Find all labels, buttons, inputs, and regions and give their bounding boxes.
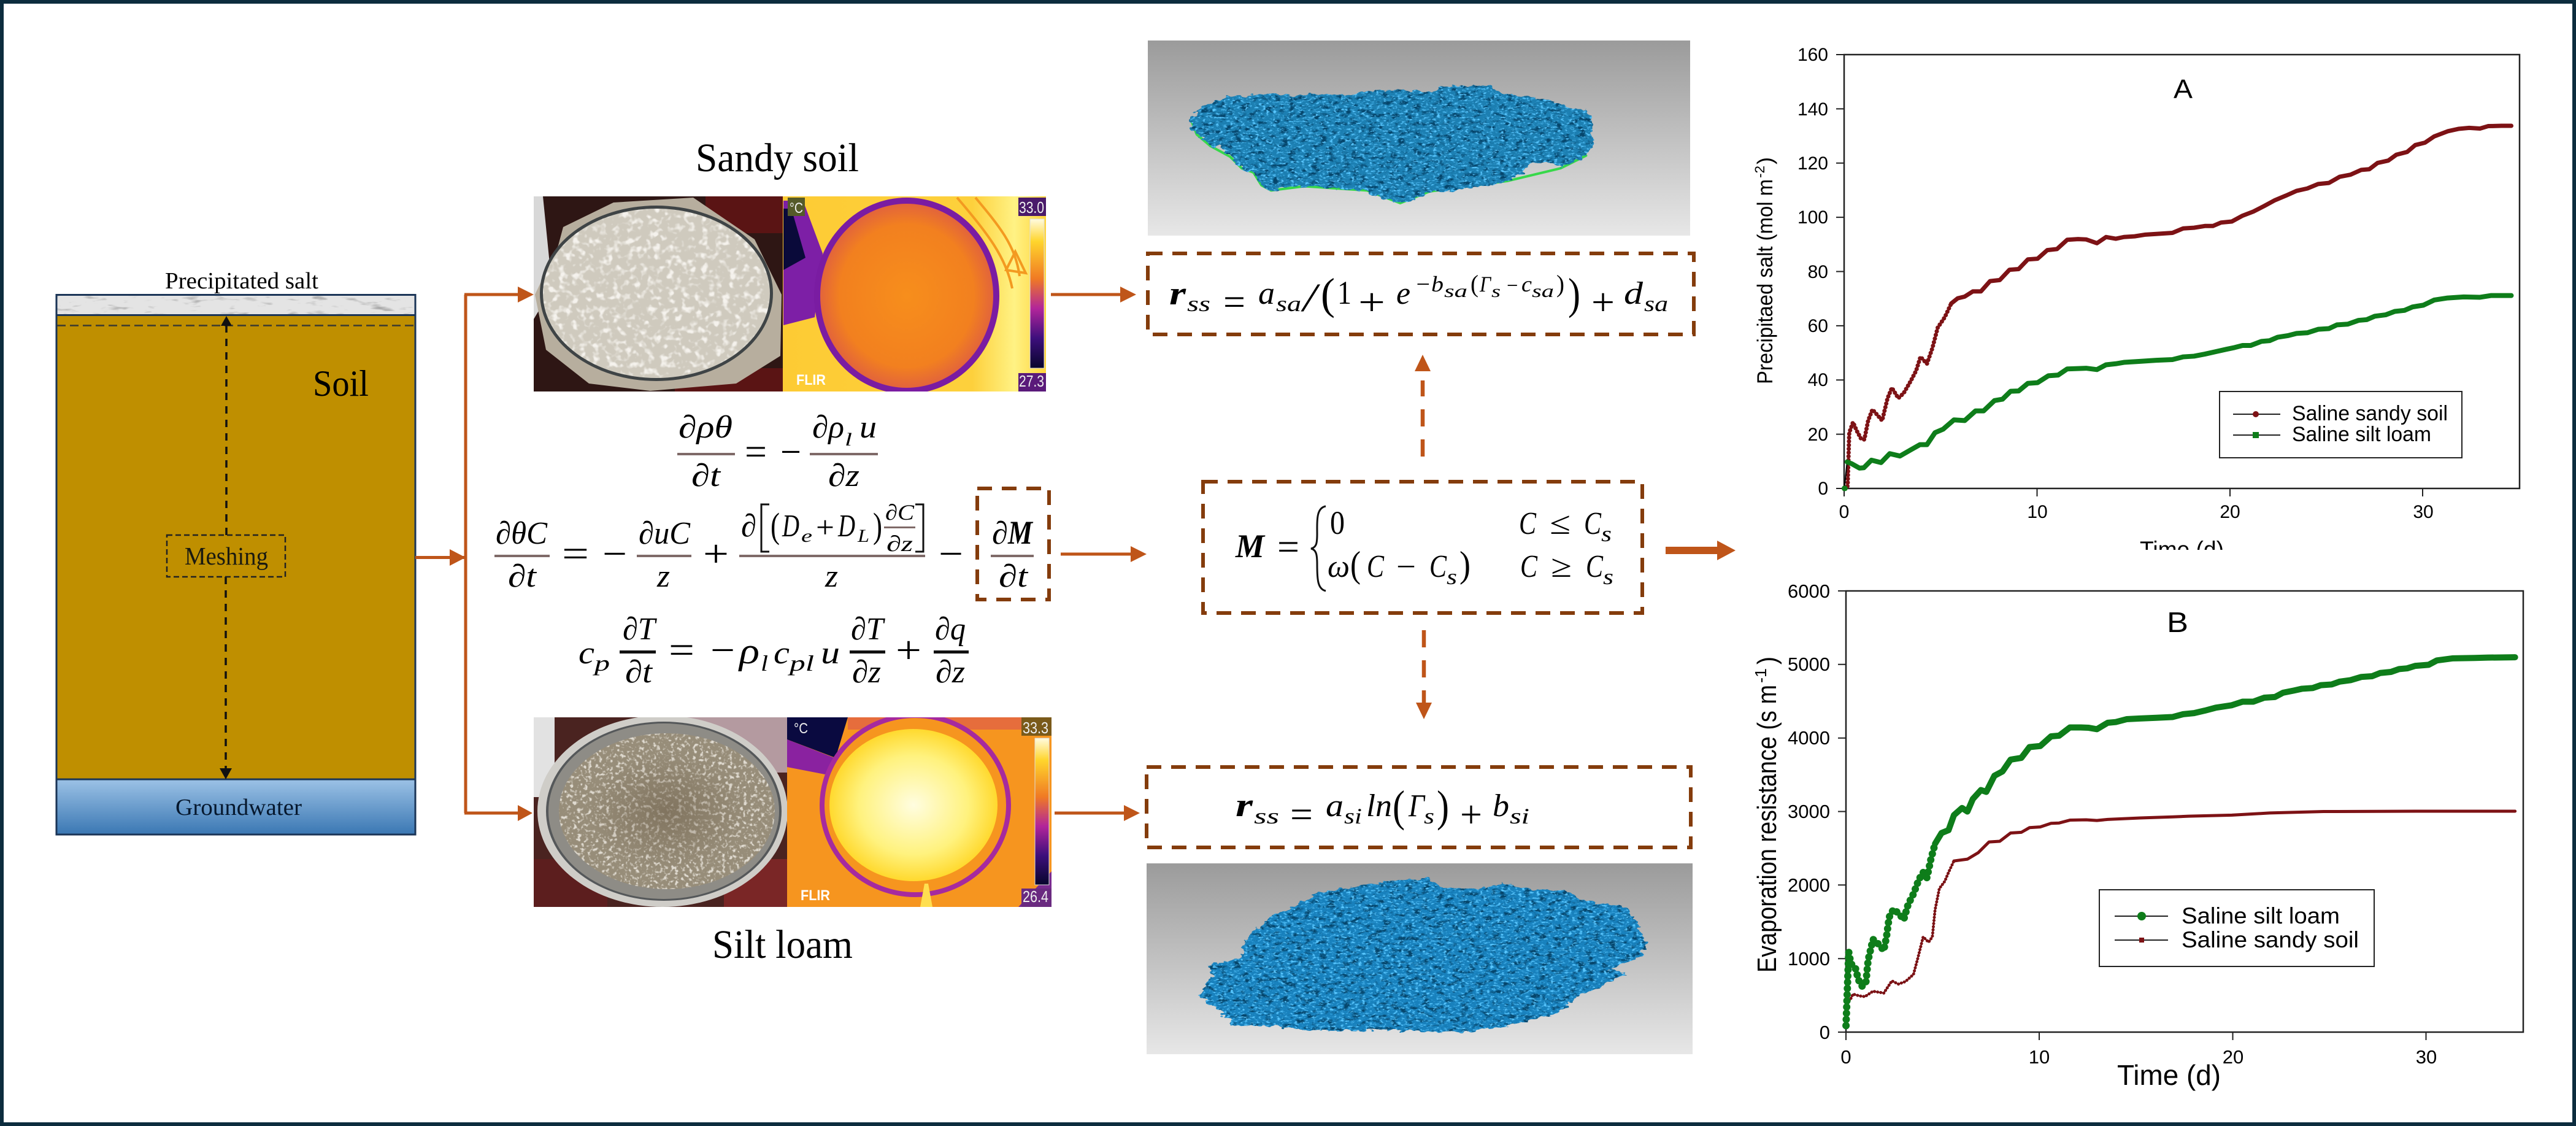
- chart A legend: [2220, 391, 2462, 458]
- chart B x axis title: Time (d): [2117, 1059, 2221, 1091]
- chart B y tick labels: [1788, 580, 1830, 1043]
- chart B x tick labels: [1840, 1046, 2437, 1068]
- label: groundwater: Groundwater: [175, 795, 302, 820]
- equation box: salt precipitation model: s: [1447, 565, 1457, 589]
- thermal image: silt loam: 33.3: [1023, 719, 1048, 737]
- chart B y axis title: -1: [1751, 668, 1770, 683]
- equation box: silt loam surface resistance: s: [1424, 804, 1434, 828]
- equation box: salt precipitation model: C: [1584, 506, 1602, 541]
- chart B legend: [2099, 890, 2374, 966]
- column outline: [56, 295, 415, 835]
- equation box: salt precipitation model: ≥: [1551, 549, 1572, 584]
- chart A axis ticks: [1836, 55, 2423, 496]
- equation box: salt precipitation model: M: [1235, 528, 1266, 565]
- equation box: salt precipitation model: C: [1367, 549, 1385, 584]
- thermal image: sandy soil: 33.0: [1019, 198, 1044, 217]
- equation box: salt precipitation model: −: [1396, 549, 1416, 584]
- equation: solute transport: ): [873, 506, 882, 546]
- equation box: sandy soil surface resistance: a: [1258, 276, 1275, 311]
- equation: water mass balance: ∂z: [828, 458, 859, 493]
- equation box: salt precipitation model: s: [1603, 565, 1613, 589]
- equation: heat transport: pl: [787, 651, 814, 676]
- series: saline silt loam: [1844, 296, 2512, 488]
- equation: solute transport: ∂uC: [639, 516, 691, 551]
- equation box: silt loam surface resistance: r: [1236, 787, 1253, 823]
- chart B x tick labels: 20: [2223, 1046, 2243, 1068]
- thermal image: silt loam: FLIR: [801, 887, 830, 904]
- equation box: sandy soil surface resistance: s: [1491, 282, 1501, 301]
- equation box: salt precipitation model: C: [1519, 506, 1537, 541]
- series: saline silt loam: [1846, 657, 2515, 1025]
- chart B y tick labels: 5000: [1788, 654, 1830, 675]
- equation box: sandy soil surface resistance: sa: [1444, 281, 1467, 301]
- equation: water mass balance: l: [845, 430, 852, 450]
- equation: solute transport: −: [602, 533, 627, 575]
- equation box: sandy soil surface resistance: 1: [1337, 274, 1351, 311]
- equation: heat transport: u: [821, 636, 840, 671]
- chart A y tick labels: 60: [1808, 316, 1828, 336]
- arrow: soil column to branches: [415, 295, 466, 813]
- equation: heat transport: ρ: [738, 631, 759, 671]
- equation box: silt loam surface resistance: si: [1344, 804, 1362, 828]
- chart A plot frame: [1844, 55, 2520, 488]
- chart A x tick labels: 20: [2220, 502, 2240, 522]
- equation box: salt precipitation model: ≤: [1550, 506, 1571, 541]
- equation: solute transport: ∂: [992, 516, 1008, 551]
- equation box: salt precipitation model: C: [1520, 549, 1538, 584]
- arrow: mesh downward: [220, 577, 232, 779]
- equation box: sandy soil surface resistance: [1148, 253, 1694, 334]
- photo: silt loam surface: [534, 715, 788, 907]
- chart A x axis title, clipped: Time (d): [2140, 537, 2224, 562]
- equation: solute transport: +: [816, 510, 834, 544]
- equation box: silt loam surface resistance: si: [1510, 804, 1529, 828]
- chart A: precipitated salt: [1752, 45, 2520, 562]
- equation box: sandy soil surface resistance: (: [1471, 270, 1478, 298]
- equation box: sandy soil surface resistance: −: [1505, 273, 1519, 298]
- equation box: salt precipitation model: 0: [1330, 504, 1345, 541]
- equation box: silt loam surface resistance: (: [1393, 782, 1405, 831]
- equation: water mass balance: ∂t: [691, 458, 721, 493]
- layer: soil: [57, 315, 415, 779]
- equation box: silt loam surface resistance: b: [1493, 789, 1509, 823]
- arrow: model to result charts: [1666, 541, 1736, 560]
- equation: solute transport: ∂C: [885, 500, 915, 525]
- equation box: salt precipitation model: C: [1586, 549, 1604, 584]
- equation: heat transport: p: [592, 651, 610, 676]
- equation: solute transport: D: [837, 509, 855, 544]
- chart A letter: A: [2174, 74, 2193, 104]
- equation box: silt loam surface resistance: Γ: [1408, 789, 1426, 823]
- equation: solute transport: L: [857, 526, 869, 546]
- equation: heat transport: c: [579, 636, 594, 671]
- series: saline sandy soil: [1844, 126, 2512, 488]
- photo: sandy soil surface: [534, 196, 783, 391]
- heading: silt loam: Silt loam: [712, 922, 853, 967]
- equation box: sandy soil surface resistance: ss: [1187, 291, 1210, 316]
- equation box: sandy soil surface resistance: sa: [1532, 281, 1554, 301]
- image: silt loam 3D scan: [1147, 863, 1693, 1054]
- equation: solute transport: ∂t: [508, 559, 537, 594]
- equation: heat transport: [579, 612, 969, 690]
- equation: heat transport: c: [774, 636, 790, 671]
- chart B legend: Saline sandy soil: [2182, 927, 2359, 952]
- equation box: sandy soil surface resistance: ): [1556, 270, 1564, 298]
- equation: solute transport: (: [771, 506, 780, 546]
- heading: sandy soil: Sandy soil: [696, 136, 859, 180]
- thermal image: silt loam: °C: [794, 720, 808, 737]
- thermal image: sandy soil: 27.3: [1019, 372, 1044, 390]
- equation box: sandy soil surface resistance: +: [1591, 282, 1615, 323]
- equation box: sandy soil surface resistance: r: [1169, 275, 1186, 312]
- chart B plot frame: [1846, 591, 2523, 1032]
- arrow: branch to silt loam photo: [464, 805, 533, 821]
- equation box: sandy soil surface resistance: −b: [1415, 272, 1444, 296]
- equation box: salt precipitation model: [1203, 482, 1642, 613]
- meshing label box: [167, 535, 285, 577]
- equation box: sandy soil surface resistance: c: [1521, 272, 1532, 296]
- chart A y tick labels: 0: [1818, 479, 1828, 499]
- equation: water mass balance: =: [745, 431, 767, 473]
- equation box: sandy soil surface resistance: e: [1396, 276, 1410, 311]
- chart B y tick labels: 1000: [1788, 948, 1830, 970]
- chart B y tick labels: 6000: [1788, 580, 1830, 602]
- thermal image: sandy soil: °C: [790, 200, 803, 217]
- arrow: model up to sandy equation: [1415, 355, 1431, 457]
- precipitation term highlight box: [977, 488, 1049, 600]
- equation box: silt loam surface resistance: =: [1290, 794, 1313, 836]
- equation box: salt precipitation model: (: [1350, 544, 1361, 585]
- evaporation front dashed line: [57, 325, 415, 326]
- equation: solute transport: D: [782, 509, 799, 544]
- equation: heat transport: =: [669, 630, 694, 671]
- equation: solute transport: =: [562, 533, 589, 575]
- equation: heat transport: ∂z: [852, 655, 881, 690]
- meshing label box: Meshing: [185, 542, 268, 570]
- label: soil: Soil: [313, 363, 369, 404]
- chart B data series: [1846, 657, 2515, 1025]
- chart A x tick labels: 30: [2413, 502, 2434, 522]
- equation: solute transport: −: [939, 533, 963, 575]
- thermal image: sandy soil: [783, 196, 1046, 391]
- chart B axis ticks: [1838, 591, 2426, 1040]
- equation box: sandy soil surface resistance: =: [1223, 282, 1245, 323]
- chart A y tick labels: 160: [1797, 45, 1828, 65]
- equation box: sandy soil surface resistance: sa: [1276, 291, 1301, 316]
- chart B x tick labels: 0: [1840, 1046, 1851, 1068]
- chart B y tick labels: 3000: [1788, 801, 1830, 822]
- chart B y axis title: ): [1752, 657, 1782, 665]
- label: precipitated salt: Precipitated salt: [165, 268, 318, 294]
- equation box: silt loam surface resistance: ): [1437, 782, 1449, 831]
- chart A x tick labels: 10: [2027, 502, 2048, 522]
- equation box: silt loam surface resistance: ln: [1366, 789, 1392, 823]
- equation box: sandy soil surface resistance: /: [1300, 276, 1321, 320]
- chart A y tick labels: 80: [1808, 262, 1828, 282]
- equation box: salt precipitation model: =: [1277, 526, 1299, 568]
- equation: heat transport: ∂T: [623, 612, 657, 647]
- equation box: sandy soil surface resistance: ): [1568, 269, 1580, 318]
- chart A legend: Saline sandy soil: [2292, 402, 2448, 425]
- chart A y tick labels: 20: [1808, 425, 1828, 445]
- arrow: sandy thermal to sandy equation: [1051, 287, 1136, 303]
- equation: water mass balance: −: [780, 431, 801, 473]
- thermal image: silt loam: [787, 715, 1052, 907]
- chart B letter: B: [2167, 606, 2188, 638]
- thermal image: sandy soil: FLIR: [796, 372, 826, 388]
- equation box: silt loam surface resistance: a: [1326, 789, 1344, 823]
- arrow: precipitation term to model: [1061, 546, 1147, 562]
- equation: heat transport: ∂T: [851, 612, 885, 647]
- equation box: sandy soil surface resistance: (: [1321, 269, 1335, 318]
- chart A y axis title: -2: [1752, 166, 1767, 178]
- arrow: silt thermal to silt equation: [1055, 805, 1140, 821]
- chart B legend: Saline silt loam: [2182, 903, 2340, 928]
- equation: heat transport: ∂q: [935, 612, 966, 647]
- equation box: silt loam surface resistance: ss: [1254, 804, 1279, 828]
- chart B y tick labels: 2000: [1788, 874, 1830, 896]
- arrow: model down to silt equation: [1416, 630, 1432, 719]
- chart A x tick labels: [1839, 502, 2434, 522]
- equation box: sandy soil surface resistance: Γ: [1479, 272, 1491, 296]
- chart B x tick labels: 10: [2029, 1046, 2050, 1068]
- layer: groundwater: [57, 779, 415, 835]
- chart B: evaporation resistance: [1751, 580, 2523, 1091]
- image: sandy soil 3D scan: [1148, 40, 1690, 236]
- chart A y axis title: ): [1753, 157, 1777, 164]
- equation: solute transport: ∂z: [886, 531, 913, 556]
- chart B y axis title: Evaporation resistance (s m: [1752, 685, 1782, 973]
- thermal image: silt loam: 26.4: [1023, 887, 1048, 906]
- equation box: salt precipitation model: ω: [1328, 549, 1350, 584]
- equation box: salt precipitation model: ): [1459, 544, 1471, 585]
- equation: heat transport: ∂t: [625, 655, 653, 690]
- chart A y tick labels: 120: [1797, 153, 1828, 174]
- series: saline sandy soil: [1846, 811, 2515, 1025]
- equation box: silt loam surface resistance: [1147, 767, 1691, 847]
- equation: water mass balance: [677, 410, 878, 493]
- equation: water mass balance: ∂ρ: [812, 410, 844, 445]
- chart A x tick labels: 0: [1839, 502, 1849, 522]
- equation: heat transport: +: [896, 630, 921, 671]
- equation box: silt loam surface resistance: +: [1460, 794, 1482, 836]
- equation box: sandy soil surface resistance: sa: [1644, 291, 1668, 316]
- equation box: salt precipitation model: C: [1429, 549, 1447, 584]
- chart A y tick labels: [1797, 45, 1828, 499]
- equation: solute transport: ∂t: [999, 559, 1029, 594]
- equation box: sandy soil surface resistance: +: [1358, 282, 1385, 323]
- chart A legend: Saline silt loam: [2292, 423, 2431, 446]
- arrow: branch to sandy soil photo: [464, 287, 534, 303]
- equation: solute transport: ∂: [741, 509, 756, 544]
- panel: soil column diagram: [56, 268, 415, 835]
- chart B x tick labels: 30: [2416, 1046, 2437, 1068]
- equation: heat transport: ∂z: [936, 655, 965, 690]
- chart A y tick labels: 140: [1797, 99, 1828, 120]
- equation box: salt precipitation model: s: [1601, 522, 1612, 546]
- equation: solute transport: [494, 488, 1049, 600]
- equation: solute transport: +: [703, 533, 729, 575]
- equation: water mass balance: ∂ρθ: [679, 410, 732, 445]
- equation: solute transport: z: [656, 559, 670, 594]
- layer: precipitated salt crust: [57, 295, 415, 315]
- equation: solute transport: M: [1007, 514, 1034, 551]
- equation: solute transport: e: [801, 526, 812, 546]
- chart A y axis title: Precipitaed salt (mol m: [1753, 179, 1777, 384]
- equation box: sandy soil surface resistance: d: [1624, 276, 1644, 311]
- equation: solute transport: z: [825, 559, 838, 594]
- equation: heat transport: −: [710, 630, 735, 671]
- chart A data series: [1844, 126, 2512, 488]
- arrow: mesh upward: [221, 316, 232, 535]
- chart B y tick labels: 0: [1820, 1022, 1830, 1043]
- chart A y tick labels: 40: [1808, 370, 1828, 390]
- chart A y tick labels: 100: [1797, 207, 1828, 228]
- equation: solute transport: ∂θC: [496, 516, 548, 551]
- chart B y tick labels: 4000: [1788, 727, 1830, 749]
- equation: heat transport: l: [761, 651, 768, 676]
- equation: water mass balance: u: [859, 410, 877, 445]
